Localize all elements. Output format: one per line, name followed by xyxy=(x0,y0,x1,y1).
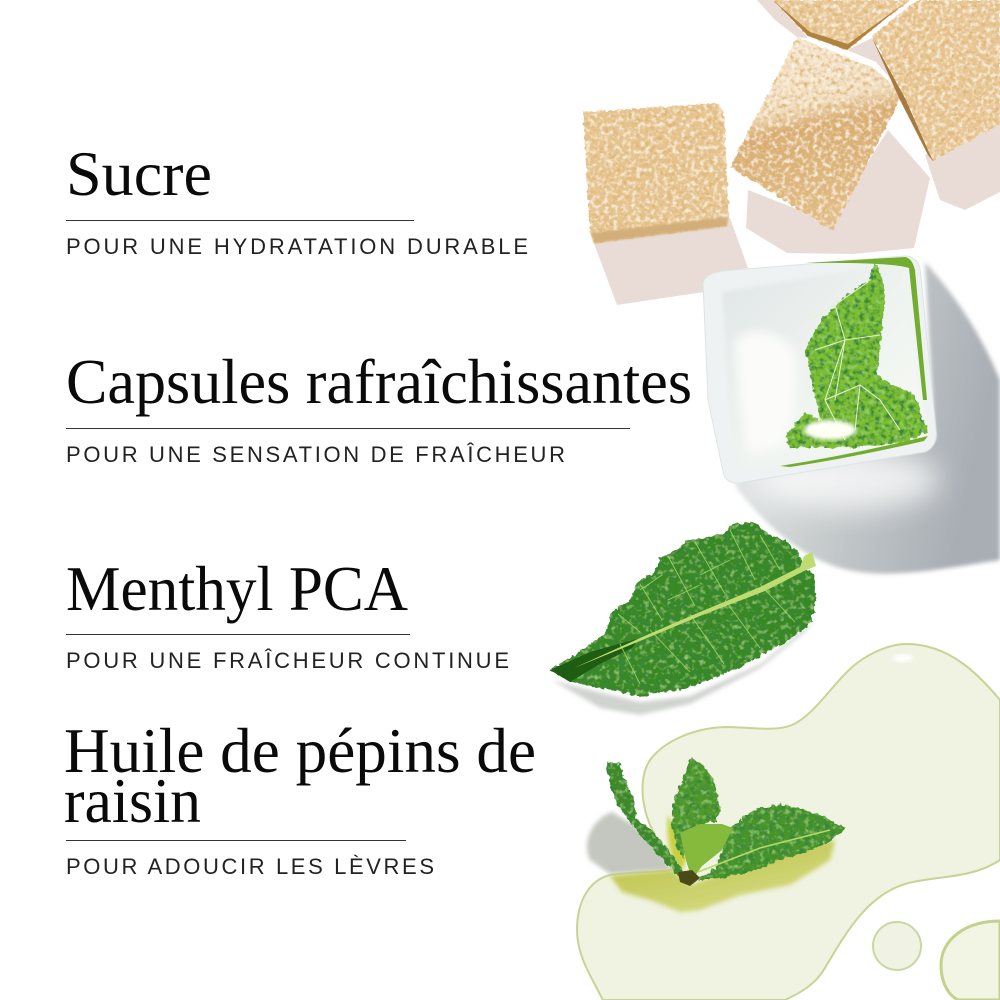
ice cube bright highlight xyxy=(804,420,856,440)
rule xyxy=(66,220,414,221)
subheading: POUR UNE FRAÎCHEUR CONTINUE xyxy=(66,648,509,673)
shadows: sugar cubes xyxy=(592,0,1000,305)
oil glow near leaf xyxy=(668,815,690,875)
heading: Sucre: Sucre xyxy=(66,138,212,209)
sprig middle leaf xyxy=(672,757,720,860)
mint leaf in ice xyxy=(785,262,928,448)
sugar cube top left xyxy=(583,103,729,243)
shadow: ice cube xyxy=(730,262,1000,574)
sugar cube top right xyxy=(872,0,1000,161)
ingredient image: mint sprig xyxy=(606,757,845,886)
ingredient image: ice cube with mint xyxy=(703,256,936,483)
heading: Menthyl PCA: Menthyl PCA xyxy=(66,553,408,624)
sprig shadow through oil xyxy=(610,840,835,912)
heading: Huile de pépins de raisin: raisin xyxy=(64,765,201,836)
mint leaf blade xyxy=(550,522,816,697)
ingredient block: Sucre xyxy=(66,138,528,259)
sprig right leaf midrib xyxy=(698,830,830,872)
sprig pale young leaf xyxy=(680,824,733,880)
ingredient image: mint leaf xyxy=(550,522,816,697)
ice cube caustic glow xyxy=(750,450,940,510)
subheading: POUR UNE HYDRATATION DURABLE xyxy=(66,234,528,259)
heading: Huile de pépins de raisin: Huile de pépins de xyxy=(64,715,536,786)
subheading: POUR UNE SENSATION DE FRAÎCHEUR xyxy=(66,442,565,467)
ingredient block: Huile de pépins de raisin xyxy=(64,715,536,879)
ingredient image: brown sugar cubes xyxy=(583,0,1000,243)
mint leaf dark lower fold xyxy=(550,638,640,682)
ice cube green refraction edges xyxy=(780,257,928,467)
sprig shadow on table xyxy=(587,812,672,874)
ice cube inner face xyxy=(722,262,926,470)
ingredient block: Menthyl PCA xyxy=(66,553,509,673)
subheading: POUR ADOUCIR LES LÈVRES xyxy=(66,854,434,879)
sugar cube top side edge xyxy=(773,0,905,50)
rule xyxy=(66,428,630,429)
oil droplet small xyxy=(873,922,921,970)
oil droplet large xyxy=(941,921,1000,1000)
sugar cube top right side edge xyxy=(872,38,933,161)
rule xyxy=(66,840,406,841)
ice cube body xyxy=(703,256,936,483)
shadow: mint sprig xyxy=(587,812,835,912)
rule xyxy=(66,634,410,635)
ice white frost xyxy=(735,332,796,455)
sprig left leaf xyxy=(606,762,686,880)
ingredient image: oil puddle xyxy=(577,644,1000,1000)
mint leaf midrib xyxy=(574,552,816,668)
sugar cube side strip left xyxy=(592,217,727,243)
heading: Capsules rafraîchissantes: Capsules rafraîchissantes xyxy=(66,346,692,417)
shadow: mint leaf xyxy=(552,620,815,715)
ingredient block: Capsules rafraîchissantes xyxy=(66,346,692,467)
oil puddle main xyxy=(577,644,1000,1000)
sugar cube top xyxy=(773,0,910,50)
mint leaf veins xyxy=(618,530,795,684)
mint leaf veins in ice xyxy=(810,282,900,440)
sprig right leaf xyxy=(696,804,845,880)
oil highlight xyxy=(893,654,913,662)
sugar cube centre xyxy=(730,37,903,231)
sprig stem base xyxy=(678,870,700,886)
